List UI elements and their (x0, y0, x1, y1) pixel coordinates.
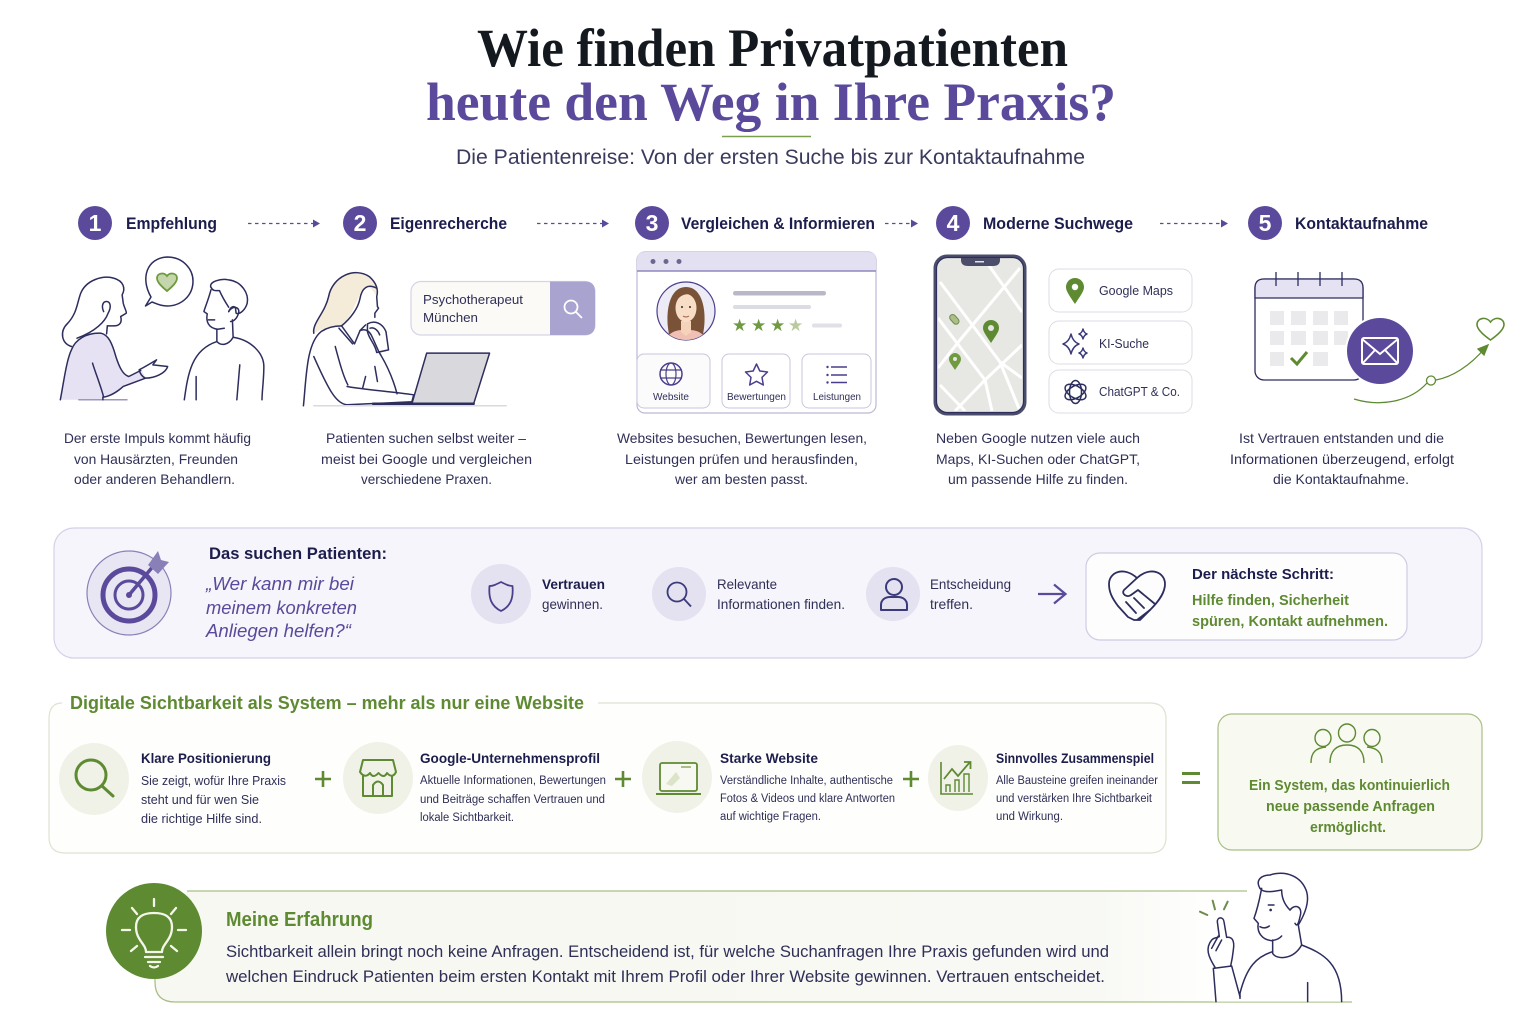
heading and quote: „Wer kann mir bei (205, 574, 355, 594)
star rating: ★ (751, 316, 766, 335)
heading and quote: Das suchen Patienten: (209, 544, 387, 563)
card: KI-Suche: KI-Suche (1099, 336, 1149, 351)
card: KI-Suche (1049, 321, 1192, 364)
arrow (1038, 584, 1066, 604)
find item: Informationen finden. (717, 596, 845, 612)
item: google profile: lokale Sichtbarkeit. (420, 812, 514, 824)
icon: people (1311, 724, 1382, 763)
card: ChatGPT: ChatGPT & Co. (1099, 384, 1180, 399)
item: google profile: Google-Unternehmensprofil (420, 750, 600, 766)
arrow 1 to 2 (248, 220, 320, 228)
item: google profile: Aktuelle Informationen, Bewertungen (420, 775, 606, 787)
item: positioning: Klare Positionierung (141, 750, 271, 766)
arrow 3 to 4 (885, 220, 918, 228)
illustration: two people talking (60, 277, 264, 400)
item: website: auf wichtige Fragen. (720, 811, 821, 823)
subtitle: Die Patientenreise: Von der ersten Suche bis zur Kontaktaufnahme (456, 146, 1085, 169)
next step box: Der nächste Schritt: (1192, 566, 1334, 583)
item: google profile (343, 742, 606, 824)
text: step 5: die Kontaktaufnahme. (1273, 471, 1409, 487)
tab: website (637, 354, 710, 408)
trust item: gewinnen. (542, 596, 603, 612)
item: website: Starke Website (720, 750, 818, 766)
text: step 3: Websites besuchen, Bewertungen lesen, (617, 430, 867, 446)
tab: services: Leistungen (813, 391, 861, 403)
step 4 header: 4 (947, 210, 960, 236)
calendar (1255, 272, 1363, 380)
step 3 header: Vergleichen & Informieren (681, 214, 875, 233)
card: ChatGPT (1049, 370, 1192, 413)
step 4 header (936, 206, 1133, 240)
item: website (642, 741, 895, 823)
result box (1218, 714, 1482, 850)
card: Google Maps (1049, 269, 1192, 312)
decide item: Entscheidung (930, 576, 1011, 592)
text: step 2: Patienten suchen selbst weiter – (326, 430, 526, 446)
search box (411, 282, 595, 335)
title: Wie finden Privatpatienten (477, 18, 1068, 78)
plus (315, 771, 331, 787)
text: step 2: meist bei Google und vergleichen (321, 451, 532, 467)
item: positioning: Sie zeigt, wofür Ihre Praxis (141, 774, 286, 788)
item: positioning: die richtige Hilfe sind. (141, 812, 262, 826)
card: Google Maps: Google Maps (1099, 283, 1173, 298)
trust item (471, 564, 605, 624)
panel: what patients look for (54, 528, 1482, 658)
text: step 3: wer am besten passt. (674, 471, 808, 487)
item: interplay chart: und verstärken Ihre Sichtbarkeit (996, 793, 1153, 805)
step 5 header: 5 (1259, 210, 1272, 236)
item: positioning: steht und für wen Sie (141, 793, 259, 807)
arrow: path to heart (1354, 318, 1504, 403)
next step box: Hilfe finden, Sicherheit (1192, 593, 1349, 609)
item: google profile: und Beiträge schaffen Vertrauen und (420, 794, 605, 806)
icon: speech bubble with heart (146, 257, 193, 306)
result box: Ein System, das kontinuierlich (1249, 778, 1450, 794)
star rating (732, 316, 803, 335)
panel: my experience: Sichtbarkeit allein bringt noch keine Anfragen. Entscheidend ist, für welche Suchanfragen Ihre Praxis gefunden wird und (226, 943, 1109, 961)
icon: mail circle (1345, 316, 1415, 386)
step 2 header (343, 206, 507, 240)
text: step 1: von Hausärzten, Freunden (74, 451, 238, 467)
panel: my experience: welchen Eindruck Patienten beim ersten Kontakt mit Ihrem Profil oder Ihrer Website gewinnen. Vertrauen entscheidet. (225, 968, 1105, 986)
result box: neue passende Anfragen (1266, 799, 1435, 815)
next step box: spüren, Kontakt aufnehmen. (1192, 614, 1388, 630)
find item: Relevante (717, 576, 777, 592)
heading and quote: Anliegen helfen?“ (205, 621, 352, 641)
plus (903, 771, 919, 787)
text: step 4: Neben Google nutzen viele auch (936, 430, 1140, 446)
step 5 header (1248, 206, 1428, 240)
phone with map (935, 256, 1025, 414)
panel: my experience (155, 891, 1352, 1002)
tab: reviews: Bewertungen (727, 391, 786, 403)
text: step 1: oder anderen Behandlern. (74, 471, 235, 487)
tab: website: Website (653, 391, 689, 403)
heading and quote: meinem konkreten (206, 598, 357, 618)
tab: reviews (722, 354, 790, 408)
search box: München (423, 310, 478, 325)
heading and quote (205, 544, 387, 641)
item: positioning (59, 743, 286, 826)
text: step 2: verschiedene Praxen. (361, 471, 492, 487)
text: step 5 (1230, 430, 1454, 487)
plus (615, 771, 631, 787)
text: step 4: um passende Hilfe zu finden. (948, 471, 1128, 487)
section heading: Digitale Sichtbarkeit als System – mehr als nur eine Website (70, 692, 584, 713)
step 2 header: Eigenrecherche (390, 214, 507, 233)
panel: digital visibility (49, 692, 1166, 853)
find item (652, 567, 845, 621)
text: step 1: Der erste Impuls kommt häufig (64, 430, 251, 446)
item: website: Verständliche Inhalte, authentische (720, 775, 893, 787)
text: step 3 (617, 430, 867, 487)
step 1 header: Empfehlung (126, 214, 217, 233)
trust item: Vertrauen (542, 576, 605, 592)
title: heute den Weg in Ihre Praxis? (426, 72, 1116, 132)
step 5 header: Kontaktaufnahme (1295, 214, 1428, 233)
star rating: ★ (770, 316, 785, 335)
item: website: Fotos & Videos und klare Antworten (720, 793, 895, 805)
avatar portrait (657, 282, 715, 342)
text: step 4: Maps, KI-Suchen oder ChatGPT, (936, 451, 1140, 467)
icon: light bulb (106, 883, 202, 979)
step 3 header (635, 206, 875, 240)
next step box (1086, 553, 1407, 640)
title (426, 18, 1116, 136)
decide item: treffen. (930, 596, 973, 612)
result box: ermöglicht. (1310, 820, 1386, 836)
text: step 3: Leistungen prüfen und herausfinden, (625, 451, 858, 467)
illustration: man pointing up (1200, 873, 1342, 1002)
panel: my experience: Meine Erfahrung (226, 909, 373, 931)
item: interplay chart (928, 745, 1158, 823)
item: interplay chart: Alle Bausteine greifen ineinander (996, 775, 1158, 787)
equals sign (1182, 774, 1200, 782)
browser window (637, 252, 876, 413)
star rating: ★ (732, 316, 747, 335)
item: interplay chart: und Wirkung. (996, 811, 1063, 823)
step 2 header: 2 (354, 210, 366, 236)
illustration: woman researching on laptop (303, 273, 506, 406)
decide item (866, 567, 1011, 621)
text: step 4 (936, 430, 1140, 487)
step 1 header (78, 206, 217, 240)
text: step 2 (321, 430, 532, 487)
arrow 4 to 5 (1160, 220, 1228, 228)
text: step 5: Informationen überzeugend, erfolgt (1230, 451, 1454, 467)
step 1 header: 1 (89, 210, 102, 236)
text: step 1 (64, 430, 251, 487)
item: interplay chart: Sinnvolles Zusammenspiel (996, 750, 1154, 766)
step 3 header: 3 (646, 210, 658, 236)
search box: Psychotherapeut (423, 292, 523, 307)
text: step 5: Ist Vertrauen entstanden und die (1239, 430, 1444, 446)
step 4 header: Moderne Suchwege (983, 214, 1133, 233)
tab: services (802, 354, 871, 408)
star rating: ★ (788, 316, 803, 335)
arrow 2 to 3 (537, 220, 609, 228)
icon: target (87, 551, 171, 635)
